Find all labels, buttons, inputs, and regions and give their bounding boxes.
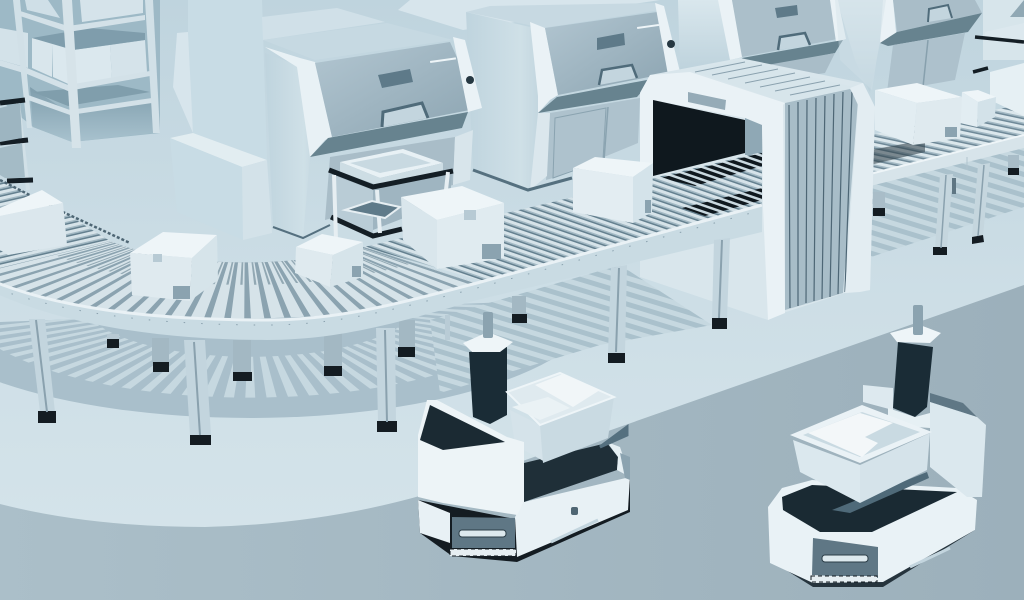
robot tote bbox=[790, 405, 932, 513]
robot chassis bbox=[418, 442, 630, 557]
boxes: on curved conveyor bbox=[0, 157, 653, 301]
robot tote bbox=[507, 373, 627, 463]
machine: center unit two bbox=[398, 0, 680, 190]
machine: far right unit bbox=[837, 0, 1024, 93]
robot tower bbox=[890, 305, 941, 417]
robot rear panel bbox=[863, 385, 986, 497]
machine: back unit three bbox=[667, 0, 886, 90]
boxes: right conveyor bbox=[875, 63, 1024, 145]
conveyor: curved and straight roller track bbox=[0, 152, 762, 340]
robot chassis bbox=[768, 480, 977, 583]
scanner tunnel: front post and ribs bbox=[762, 83, 875, 320]
conveyor: right section bbox=[860, 104, 1024, 188]
robot base shadow bbox=[770, 510, 975, 587]
robot front panel bbox=[418, 400, 524, 515]
shelf cart with tote bbox=[329, 149, 453, 240]
floor: grey robot lane bbox=[0, 285, 1024, 600]
robot tower bbox=[463, 312, 513, 424]
conveyor legs: front bbox=[29, 238, 730, 445]
scanner tunnel: body and opening bbox=[640, 58, 875, 320]
mobile robot: left bbox=[418, 312, 630, 562]
shelving: upper left racks bbox=[0, 0, 160, 190]
robot base shadow bbox=[418, 480, 630, 562]
shadow: conveyor shadow stripes on floor bbox=[0, 130, 1024, 418]
conveyor back legs: curved section bbox=[107, 296, 527, 381]
mobile robot: right bbox=[768, 305, 986, 587]
machine: front left unit one bbox=[173, 0, 482, 238]
conveyor legs: right section bbox=[873, 155, 1019, 255]
machine: side block bbox=[170, 133, 272, 240]
